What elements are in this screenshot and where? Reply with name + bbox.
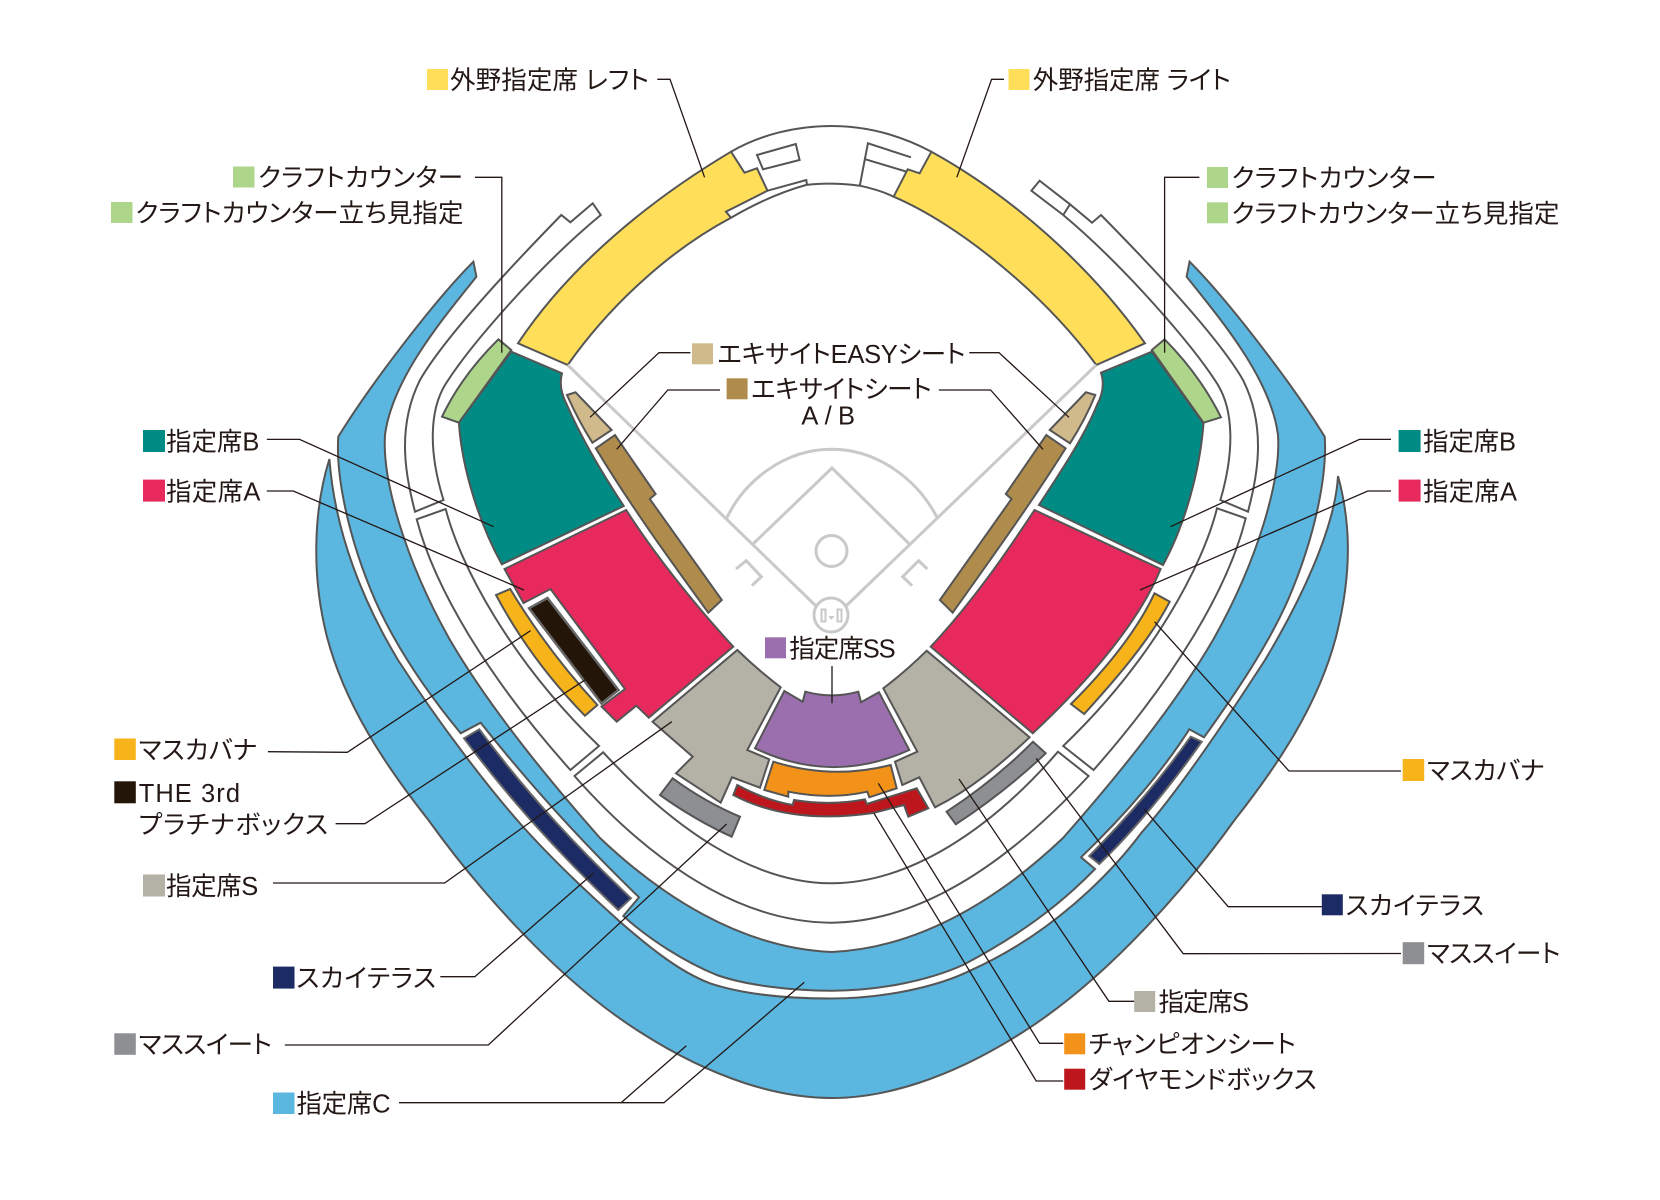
label: seat B right [1170,428,1516,527]
label: sky terrace left [273,873,593,993]
label: seat SS [765,636,896,703]
label: champion seat: チャンピオンシート [1089,1031,1296,1059]
seat block: excite easy left [567,392,612,443]
label: champion seat [878,783,1296,1059]
label: seat C [273,982,804,1118]
label: outfield right [957,67,1231,177]
seat block: B right [1039,352,1204,565]
label: seat A right: 指定席A [1423,478,1517,506]
seat block: A right [931,510,1161,733]
concourse ring: bottom section [574,752,1089,923]
seat block: S right [883,651,1030,807]
label: seat C: 指定席C [296,1090,391,1118]
seat block: outfield right yellow [894,152,1145,365]
seat block: A left [504,510,733,722]
label: seat SS: 指定席SS [789,636,896,664]
label: mass suite right [1036,758,1560,969]
label: masu left [114,631,531,765]
seat block: sky terrace left [464,729,631,910]
label: craft counter standing left: クラフトカウンター立ち見指定 [136,200,464,228]
seat block: B left [459,352,624,564]
label: sky terrace right: スカイテラス [1346,892,1484,920]
seat block: champion seat [764,762,897,797]
label: masu left: マスカバナ [139,737,257,765]
seat block: upper ring blue band [338,262,1325,991]
label: sky terrace right [1144,809,1484,920]
label: masu right: マスカバナ [1427,758,1545,786]
seat block: craft counter right [1152,339,1221,423]
label: seat A left: 指定席A [166,478,260,506]
seat block: mass suite left [660,778,740,837]
seat block: excite right [940,435,1066,613]
seat block: craft counter left [442,339,511,423]
seat block: sky terrace right [1089,737,1202,864]
seat block: S left [652,650,781,803]
label: excite seat A/B [617,376,1043,449]
label: seat S left: 指定席S [166,873,258,901]
label: seat B left [143,428,494,527]
label: mass suite right: マススイート [1427,941,1560,969]
label: The 3rd Platinum Box: THE 3rd [139,780,240,808]
seat block: diamond box [733,785,928,817]
seat block: The 3rd Platinum Box [529,598,618,704]
concourse ring: middle right section [1063,508,1246,770]
baseball field diagram [568,365,1096,632]
concourse ring: upper right section [1031,181,1258,512]
label: The 3rd Platinum Box: プラチナボックス [139,812,328,840]
seat block: mass suite right [947,742,1046,824]
label: seat B right: 指定席B [1423,428,1516,456]
label: excite easy seat [590,341,1069,417]
label: excite seat A/B: A/B [801,403,855,431]
label: excite easy seat: エキサイトEASYシート [717,341,965,369]
seat block: SS purple [755,691,909,767]
label: masu right [1154,622,1545,786]
concourse ring: middle left section [417,509,599,770]
back screen outline [731,126,931,218]
seat block: excite left [596,435,722,613]
label: craft counter left: クラフトカウンター [258,164,463,192]
label: seat S right [959,779,1249,1017]
seat block: masu right [1071,593,1170,714]
label: seat S right: 指定席S [1158,989,1249,1017]
label: diamond box: ダイヤモンドボックス [1089,1066,1317,1094]
label: mass suite left: マススイート [139,1032,272,1060]
label: mass suite left [114,824,727,1060]
label: diamond box [874,813,1317,1094]
label: The 3rd Platinum Box [114,677,589,840]
label: outfield right: 外野指定席 ライト [1033,67,1231,95]
seat block: outer ring blue band [316,459,1348,1098]
label: craft counter left [233,164,502,353]
label: seat S left [143,722,672,901]
label: outfield left [427,67,705,177]
label: seat A right [1140,478,1517,590]
label: seat B left: 指定席B [166,428,259,456]
label: sky terrace left: スカイテラス [296,965,436,993]
label: outfield left: 外野指定席 レフト [450,67,649,95]
label: craft counter right [1165,165,1436,353]
label: excite seat A/B: エキサイトシート [751,376,932,404]
label: seat A left [143,478,524,590]
seat block: excite easy right [1050,392,1095,443]
seat block: outfield left yellow [518,152,768,365]
label: craft counter right: クラフトカウンター [1232,165,1436,193]
label: craft counter standing right: クラフトカウンター立ち見指定 [1232,200,1560,228]
concourse ring: upper left section [405,203,601,512]
seat block: masu left [496,589,597,716]
